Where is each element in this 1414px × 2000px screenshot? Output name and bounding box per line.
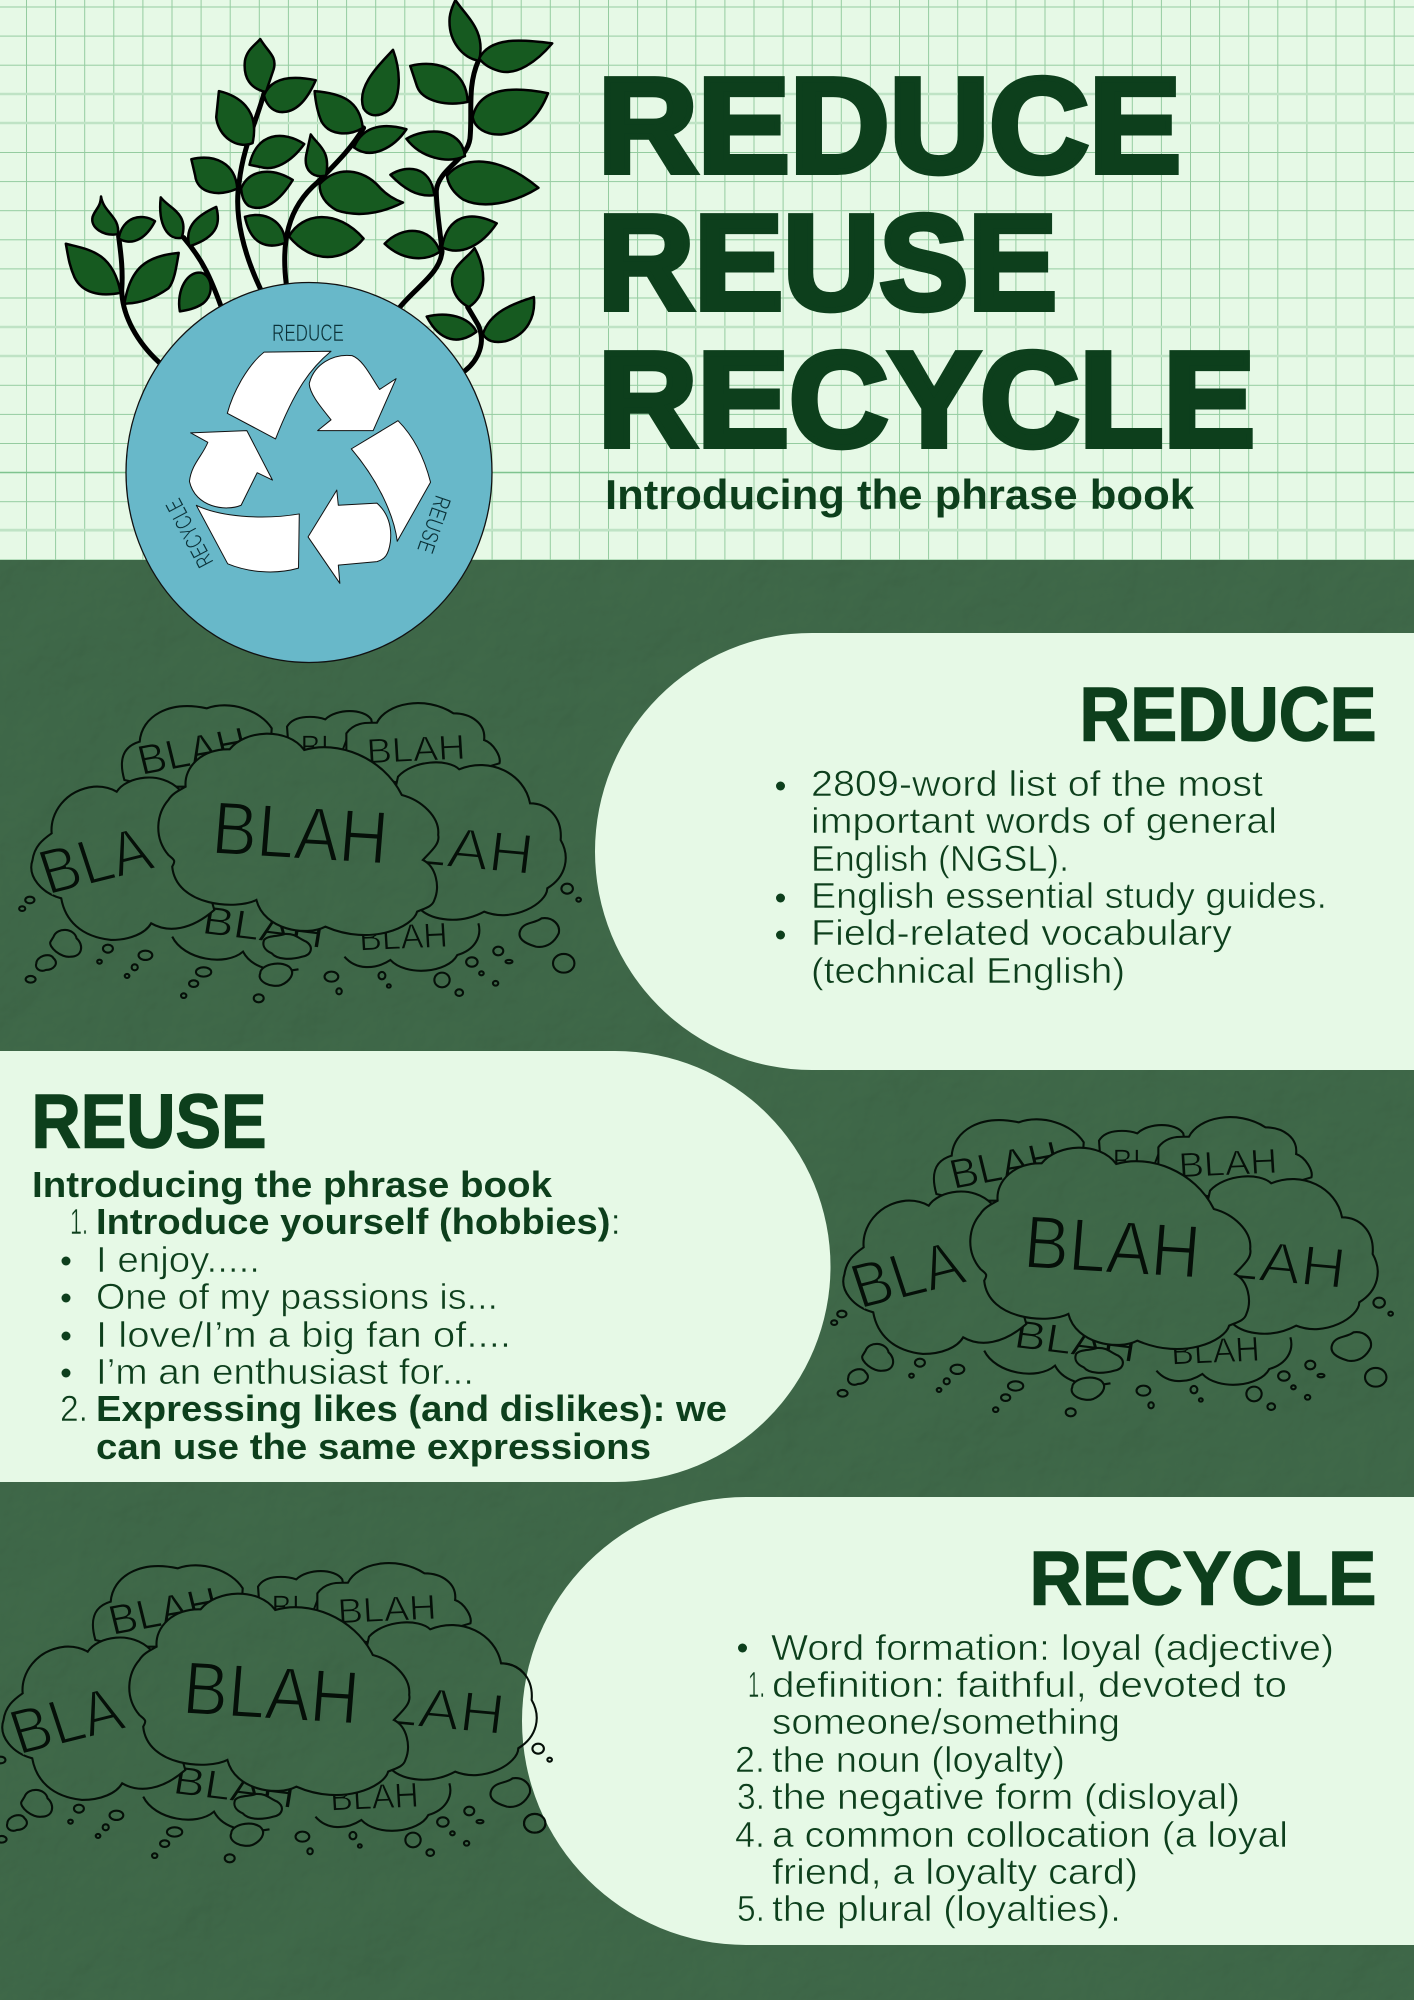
bullet list: reduce: English essential study guides. — [811, 875, 1327, 916]
numbered list: reuse: Expressing likes (and dislikes): we — [96, 1388, 727, 1429]
panel: reuse — [0, 1051, 830, 1482]
list: recycle: definition: faithful, devoted to — [772, 1664, 1287, 1705]
doodle: blah clouds bottom: BLAH — [271, 1589, 352, 1626]
panel: recycle — [522, 1497, 1414, 1945]
doodle: blah clouds top: BLAH — [365, 727, 466, 771]
list: recycle: a common collocation (a loyal — [772, 1814, 1288, 1855]
list: recycle: 2. — [735, 1739, 765, 1780]
doodle: blah clouds middle: BLAH — [1011, 1312, 1140, 1371]
numbered list: reuse: 1. — [70, 1201, 88, 1242]
label: recycle: RECYCLE — [161, 494, 219, 572]
doodle: blah clouds top: LAH — [410, 813, 537, 886]
numbered list: reuse: I enjoy..... — [96, 1239, 260, 1280]
heading: reuse: REUSE — [32, 1080, 266, 1164]
doodle: blah clouds top — [19, 703, 581, 1002]
heading: recycle: RECYCLE — [1030, 1536, 1376, 1622]
bullet list: reduce: English (NGSL). — [811, 838, 1069, 879]
title: REUSE — [598, 187, 1057, 338]
title: REDUCE — [598, 50, 1181, 201]
doodle: blah clouds bottom: BLAH — [170, 1758, 299, 1817]
list: recycle: the noun (loyalty) — [772, 1739, 1065, 1780]
bullet list: reduce: important words of general — [811, 800, 1277, 841]
illustration: plant vines and leaves — [66, 0, 552, 371]
icon: recycling arrows — [189, 351, 431, 583]
doodle: blah clouds top: BLAH — [358, 915, 449, 958]
subheading: reuse: Introducing the phrase book — [32, 1164, 553, 1205]
recycling badge — [126, 282, 492, 662]
list: recycle: 1. — [748, 1664, 765, 1705]
subtitle: Introducing the phrase book — [605, 471, 1195, 518]
bullet list: reduce: 2809-word list of the most — [811, 763, 1263, 804]
label: reduce: REDUCE — [272, 320, 344, 347]
graph paper header background — [0, 0, 1414, 560]
bullet list: reduce: Field-related vocabulary — [811, 912, 1232, 953]
cloud outline overlapping recycle panel — [501, 1663, 552, 1833]
numbered list: reuse — [60, 1201, 727, 1467]
dark green crumpled paper background — [0, 560, 1414, 2000]
numbered list: reuse: One of my passions is... — [96, 1276, 498, 1317]
doodle: blah clouds top: BLAH — [133, 718, 252, 784]
doodle: blah clouds bottom: BLAH — [104, 1578, 223, 1644]
list: recycle: the plural (loyalties). — [772, 1888, 1121, 1929]
doodle: blah clouds bottom: LAH — [381, 1673, 508, 1746]
paper texture overlay — [0, 560, 1414, 2000]
title — [598, 50, 1255, 475]
doodle: blah clouds top: BLAH — [300, 729, 381, 766]
label: reuse: REUSE — [411, 492, 456, 557]
title: RECYCLE — [598, 324, 1255, 475]
doodle: blah clouds middle: LAH — [1222, 1227, 1349, 1300]
list: recycle: someone/something — [772, 1701, 1120, 1742]
doodle: blah clouds middle: BLAH — [1021, 1201, 1203, 1295]
panel: reduce — [595, 633, 1414, 1070]
list: recycle — [735, 1627, 1334, 1929]
circle — [126, 282, 492, 662]
doodle: blah clouds bottom: BLAH — [336, 1587, 437, 1631]
doodle: blah clouds middle: BLAH — [1170, 1329, 1261, 1372]
numbered list: reuse: Introduce yourself (hobbies) : — [96, 1201, 621, 1242]
doodle: blah clouds top: BLA — [30, 813, 161, 908]
list: recycle: Word formation: loyal (adjective) — [771, 1627, 1334, 1668]
list: recycle: friend, a loyalty card) — [772, 1851, 1138, 1892]
doodle: blah clouds bottom: BLAH — [329, 1775, 420, 1818]
bullet list: reduce: (technical English) — [811, 950, 1125, 991]
numbered list: reuse: 2. — [60, 1388, 88, 1429]
bullet list: reduce — [776, 763, 1327, 991]
numbered list: reuse: I love/I’m a big fan of.... — [96, 1314, 511, 1355]
doodle: blah clouds bottom: BLAH — [180, 1647, 362, 1741]
doodle: blah clouds middle: BLAH — [1177, 1141, 1278, 1185]
list: recycle: the negative form (disloyal) — [772, 1776, 1240, 1817]
doodle: blah clouds top: BLAH — [199, 898, 328, 957]
heading: reduce: REDUCE — [1080, 672, 1376, 758]
numbered list: reuse: can use the same expressions — [96, 1426, 651, 1467]
numbered list: reuse: I’m an enthusiast for... — [96, 1351, 474, 1392]
doodle: blah clouds top: BLAH — [209, 787, 391, 881]
doodle: blah clouds middle — [831, 1117, 1393, 1416]
list: recycle: 5. — [737, 1888, 765, 1929]
doodle: blah clouds middle: BLAH — [945, 1132, 1064, 1198]
doodle: blah clouds middle: BLAH — [1112, 1143, 1193, 1180]
doodle: blah clouds bottom: BLA — [1, 1673, 132, 1768]
doodle: blah clouds bottom — [0, 1563, 552, 1862]
list: recycle: 4. — [735, 1814, 765, 1855]
list: recycle: 3. — [737, 1776, 765, 1817]
doodle: blah clouds middle: BLA — [842, 1227, 973, 1322]
